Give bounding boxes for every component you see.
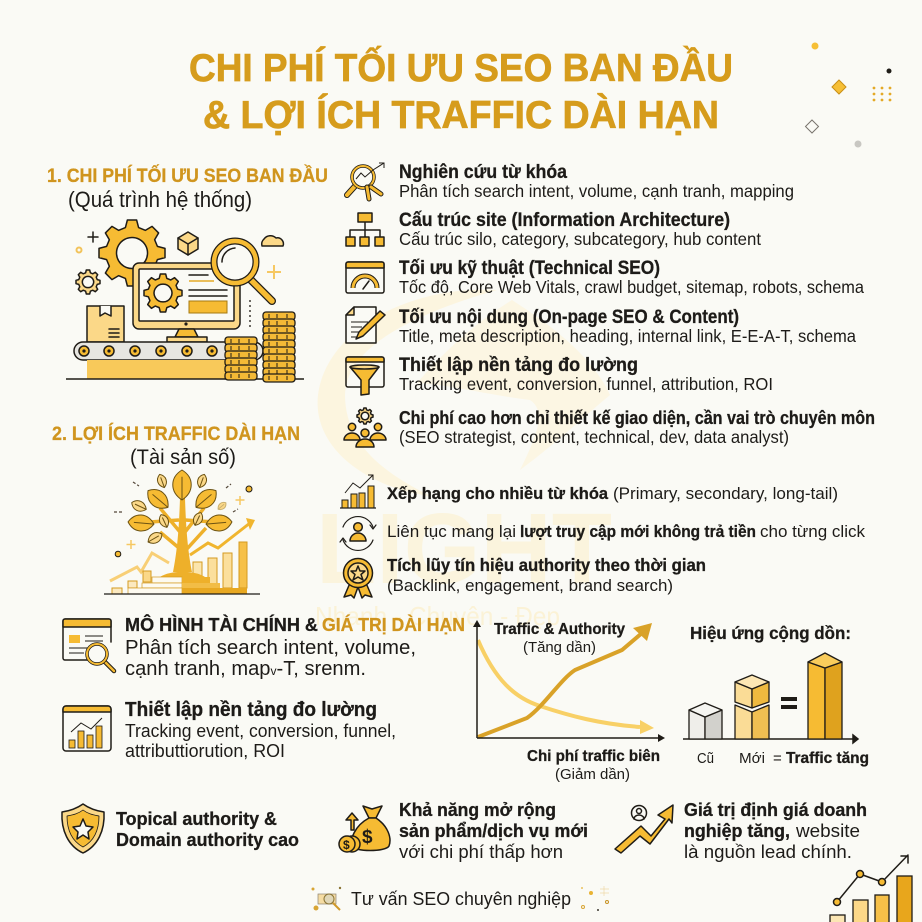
- heading: compounding effect: Hiệu ứng cộng dồn:: [690, 623, 851, 643]
- watermark wordmark: LIGHT: [316, 493, 612, 605]
- curve: marginal cost falling: [478, 640, 654, 734]
- item: keyword research: [399, 161, 794, 201]
- decorative top-right dots: [806, 42, 892, 148]
- item: keyword ranking: [387, 484, 838, 503]
- item: specialist roles: [399, 407, 875, 447]
- text: valuation: Giá trị định giá doanh: [684, 800, 867, 820]
- text: valuation: là nguồn lead chính.: [684, 842, 852, 862]
- icon: money bag and coins: $: [362, 827, 373, 848]
- heading: financial model: GIÁ TRỊ DÀI HẠN: [322, 614, 465, 635]
- chart: compounding effect: [683, 623, 869, 767]
- item: site structure: [399, 209, 761, 249]
- item: specialist roles: (SEO strategist, content, technical, dev, data analyst): [399, 427, 789, 447]
- label: traffic and authority: [494, 621, 625, 656]
- watermark tagline: Nhanh - Chuyên - Đẹp: [315, 601, 560, 631]
- text: financial model description: cạnh tranh, mapv-T, srenm.: [125, 658, 366, 680]
- item: free visits: cho từng click: [760, 522, 866, 541]
- icon: hierarchy: [346, 213, 384, 246]
- icon: money bag and coins: $: [343, 838, 350, 852]
- item: technical SEO: Tốc độ, Core Web Vitals, crawl budget, sitemap, robots, schema: [399, 277, 864, 297]
- icon: rising bars: [340, 475, 376, 508]
- labels: old, new, increased traffic: [697, 750, 869, 767]
- icon: document and pencil: [346, 307, 385, 343]
- text: valuation: website: [795, 821, 860, 841]
- item: keyword ranking: (Primary, secondary, long-tail): [613, 484, 838, 503]
- icon: speed gauge window: [346, 262, 384, 293]
- text: authority: Topical authority &: [116, 809, 277, 829]
- icon: funnel window: [346, 357, 384, 395]
- list: long-term benefits: [340, 475, 866, 598]
- title: & LỢI ÍCH TRAFFIC DÀI HẠN: [203, 93, 719, 137]
- text: expansion: Khả năng mở rộng: [399, 800, 556, 820]
- label: marginal traffic cost: [527, 748, 660, 783]
- text: expansion: [399, 800, 588, 862]
- title: [189, 45, 733, 137]
- panel: measurement: [63, 699, 396, 761]
- icon: small seo illustration: [312, 887, 341, 910]
- list: SEO cost items: [344, 161, 875, 447]
- text: measurement: Tracking event, conversion, funnel,: [125, 721, 396, 741]
- text: valuation: nghiệp tăng,: [684, 821, 790, 841]
- icon: shield star: [62, 804, 104, 853]
- cube: old: [689, 703, 722, 739]
- item: keyword research: Phân tích search intent, volume, cạnh tranh, mapping: [399, 181, 794, 201]
- item: on-page content: [399, 306, 856, 346]
- text: footer call to action: Tư vấn SEO chuyên nghiệp: [351, 889, 571, 909]
- curve: traffic and authority rising: [478, 623, 652, 737]
- footer: [312, 886, 609, 911]
- icon: window with magnifier: [63, 619, 114, 671]
- illustration: SEO process factory: [66, 220, 304, 382]
- text: authority: [116, 809, 299, 850]
- icon: analytics window: [63, 706, 111, 751]
- item: free visits: Liên tục mang lại: [387, 522, 516, 541]
- text: measurement: [125, 699, 396, 761]
- section 2 heading: 2. LỢI ÍCH TRAFFIC DÀI HẠN: [52, 422, 300, 445]
- icon: team with gear: [344, 408, 386, 447]
- labels: old, new, increased traffic: =: [773, 750, 782, 767]
- bar: total traffic: [808, 653, 842, 739]
- label: marginal traffic cost: Chi phí traffic biên: [527, 748, 660, 765]
- text: measurement: Thiết lập nền tảng đo lường: [125, 699, 377, 721]
- title: CHI PHÍ TỐI ƯU SEO BAN ĐẦU: [189, 45, 733, 90]
- panel: valuation: [615, 800, 867, 862]
- icon: person and rising arrow: [615, 805, 673, 853]
- panel: domain authority: [62, 804, 299, 853]
- watermark logo: [316, 290, 612, 605]
- item: on-page content: Title, meta description, heading, internal link, E-E-A-T, schema: [399, 326, 856, 346]
- item: site structure: Cấu trúc silo, category, subcategory, hub content: [399, 229, 761, 249]
- text: financial model description: [125, 637, 416, 680]
- label: traffic and authority: Traffic & Authority: [494, 621, 625, 638]
- item: free visits: [387, 522, 866, 541]
- chart: traffic vs marginal cost: [473, 620, 665, 783]
- text: measurement: attributtiorution, ROI: [125, 741, 285, 761]
- item: measurement setup: [399, 354, 773, 394]
- cube stack: new: [735, 675, 769, 739]
- section 1 heading: [47, 163, 328, 212]
- item: authority signals: [387, 555, 706, 595]
- item: authority signals: (Backlink, engagement, brand search): [387, 576, 673, 595]
- decorative footer dots: [581, 886, 609, 911]
- section 1 heading: 1. CHI PHÍ TỐI ƯU SEO BAN ĐẦU: [47, 163, 328, 187]
- section 2 heading: [52, 422, 300, 469]
- text: financial model description: Phân tích search intent, volume,: [125, 637, 416, 659]
- item: keyword research: Nghiên cứu từ khóa: [399, 161, 567, 183]
- item: technical SEO: [399, 257, 864, 297]
- icon: money bag and coins: [339, 806, 390, 852]
- item: technical SEO: Tối ưu kỹ thuật (Technical SEO): [399, 257, 660, 279]
- axes: [473, 620, 665, 742]
- item: measurement setup: Tracking event, conversion, funnel, attribution, ROI: [399, 374, 773, 394]
- text: authority: Domain authority cao: [116, 830, 299, 850]
- heading: financial model: MÔ HÌNH TÀI CHÍNH &: [125, 614, 318, 635]
- text: expansion: sản phẩm/dịch vụ mới: [399, 821, 588, 841]
- item: site structure: Cấu trúc site (Information Architecture): [399, 209, 730, 231]
- item: authority signals: Tích lũy tín hiệu authority theo thời gian: [387, 555, 706, 575]
- icon: award medal: [344, 558, 372, 598]
- heading: financial model: [125, 614, 465, 635]
- labels: old, new, increased traffic: Cũ: [697, 750, 714, 767]
- equals sign: [781, 697, 797, 709]
- item: on-page content: Tối ưu nội dung (On-page SEO & Content): [399, 306, 739, 328]
- axis: [683, 735, 858, 743]
- text: valuation: [684, 800, 867, 862]
- section 2 heading: (Tài sản số): [130, 446, 236, 469]
- labels: old, new, increased traffic: Traffic tăng: [786, 750, 869, 767]
- item: keyword ranking: Xếp hạng cho nhiều từ khóa: [387, 484, 609, 503]
- labels: old, new, increased traffic: Mới: [739, 750, 765, 767]
- label: marginal traffic cost: (Giảm dần): [555, 766, 630, 783]
- icon: magnifier and keys: [347, 163, 384, 199]
- section 1 heading: (Quá trình hệ thống): [68, 187, 252, 212]
- text: expansion: với chi phí thấp hơn: [399, 842, 563, 862]
- corner chart: [830, 855, 912, 922]
- item: free visits: lượt truy cập mới không trả tiền: [520, 522, 756, 541]
- icon: returning visitor cycle: [340, 517, 376, 550]
- panel: financial model: [63, 614, 465, 680]
- panel: expansion: [339, 800, 588, 862]
- illustration: growth tree: [104, 470, 260, 594]
- item: measurement setup: Thiết lập nền tảng đo lường: [399, 354, 638, 376]
- label: traffic and authority: (Tăng dần): [523, 639, 596, 656]
